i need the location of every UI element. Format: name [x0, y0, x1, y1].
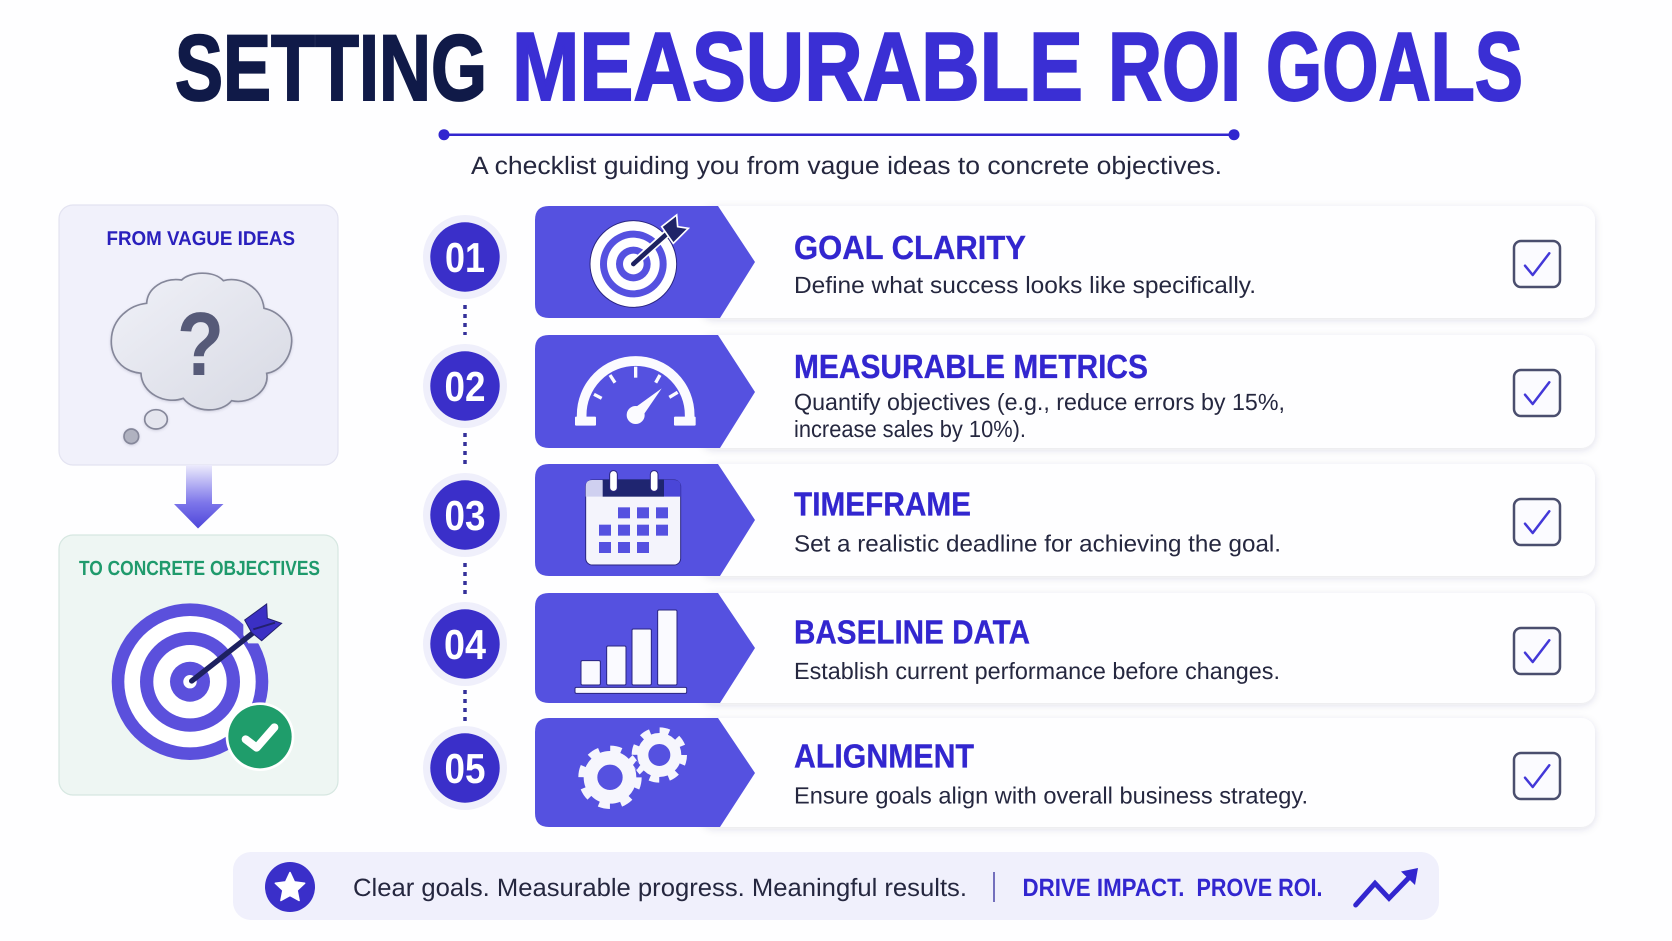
- description 03: Set a realistic deadline for achieving the goal.: [794, 531, 1281, 557]
- icon: gears: [583, 731, 683, 805]
- number badge 02: 02: [444, 363, 486, 410]
- title: GOALS: [1266, 12, 1523, 121]
- footer bar: [233, 852, 1439, 920]
- icon: target with dart: [590, 215, 688, 307]
- checkbox 03: [1514, 499, 1560, 545]
- description 02: increase sales by 10%).: [794, 416, 1026, 442]
- title: MEASURABLE: [512, 12, 1083, 121]
- heading 02: MEASURABLE METRICS: [794, 349, 1148, 386]
- description 01: Define what success looks like specifically.: [794, 272, 1256, 298]
- checkbox 02: [1514, 370, 1560, 416]
- description 02: Quantify objectives (e.g., reduce errors by 15%,: [794, 389, 1285, 415]
- number badge 03: 03: [444, 492, 486, 539]
- panel heading: from vague ideas: FROM VAGUE IDEAS: [106, 228, 295, 250]
- icon: calendar: [586, 471, 681, 565]
- title: SETTING: [175, 15, 487, 120]
- icon: star badge: [265, 862, 315, 912]
- tab 02: [535, 335, 755, 448]
- number badge 03: [423, 473, 507, 557]
- checkbox 04: [1514, 628, 1560, 674]
- title rule: [438, 129, 1240, 140]
- timeline connector dots: [463, 305, 467, 722]
- panel: to concrete objectives: [59, 535, 338, 795]
- icon: thought cloud with question mark: [111, 273, 292, 444]
- heading 05: ALIGNMENT: [794, 739, 974, 776]
- arrow: vague to concrete: [174, 465, 224, 528]
- icon: target with arrow and green check: [112, 603, 294, 771]
- title: [175, 12, 1523, 121]
- description 05: Ensure goals align with overall business strategy.: [794, 782, 1308, 808]
- footer tagline: Clear goals. Measurable progress. Meaningful results.: [353, 874, 967, 902]
- number badge 01: [423, 215, 507, 299]
- title: ROI: [1108, 12, 1241, 121]
- subtitle: A checklist guiding you from vague ideas to concrete objectives.: [471, 152, 1222, 180]
- step 04: baseline data: [423, 593, 1595, 703]
- number badge 05: [423, 726, 507, 810]
- tab 04: [535, 593, 755, 703]
- footer call to action: [1022, 874, 1322, 902]
- number badge 04: [423, 602, 507, 686]
- footer call to action: DRIVE IMPACT.: [1022, 874, 1184, 902]
- icon: rising trend arrow: [1356, 868, 1418, 905]
- step 05: alignment: [423, 718, 1595, 827]
- heading 03: TIMEFRAME: [794, 487, 971, 524]
- description 04: Establish current performance before changes.: [794, 658, 1280, 684]
- checkbox 01: [1514, 241, 1560, 287]
- number badge 01: 01: [445, 234, 485, 281]
- number badge 04: 04: [444, 621, 487, 668]
- icon: bar chart: [575, 610, 687, 693]
- step 01: goal clarity: [423, 206, 1595, 318]
- heading 04: BASELINE DATA: [794, 614, 1030, 651]
- panel heading: to concrete objectives: TO CONCRETE OBJECTIVES: [79, 557, 320, 580]
- panel: from vague ideas: [59, 205, 338, 465]
- number badge 02: [423, 344, 507, 428]
- icon: thought cloud with question mark: ?: [177, 295, 224, 395]
- step 03: timeframe: [423, 464, 1595, 576]
- icon: gauge: [575, 361, 696, 426]
- tab 01: [535, 206, 755, 318]
- number badge 05: 05: [444, 745, 486, 792]
- heading 01: GOAL CLARITY: [794, 230, 1026, 267]
- footer call to action: PROVE ROI.: [1196, 874, 1322, 902]
- tab 03: [535, 464, 755, 576]
- step 02: measurable metrics: [423, 335, 1595, 448]
- checkbox 05: [1514, 753, 1560, 799]
- tab 05: [535, 718, 755, 827]
